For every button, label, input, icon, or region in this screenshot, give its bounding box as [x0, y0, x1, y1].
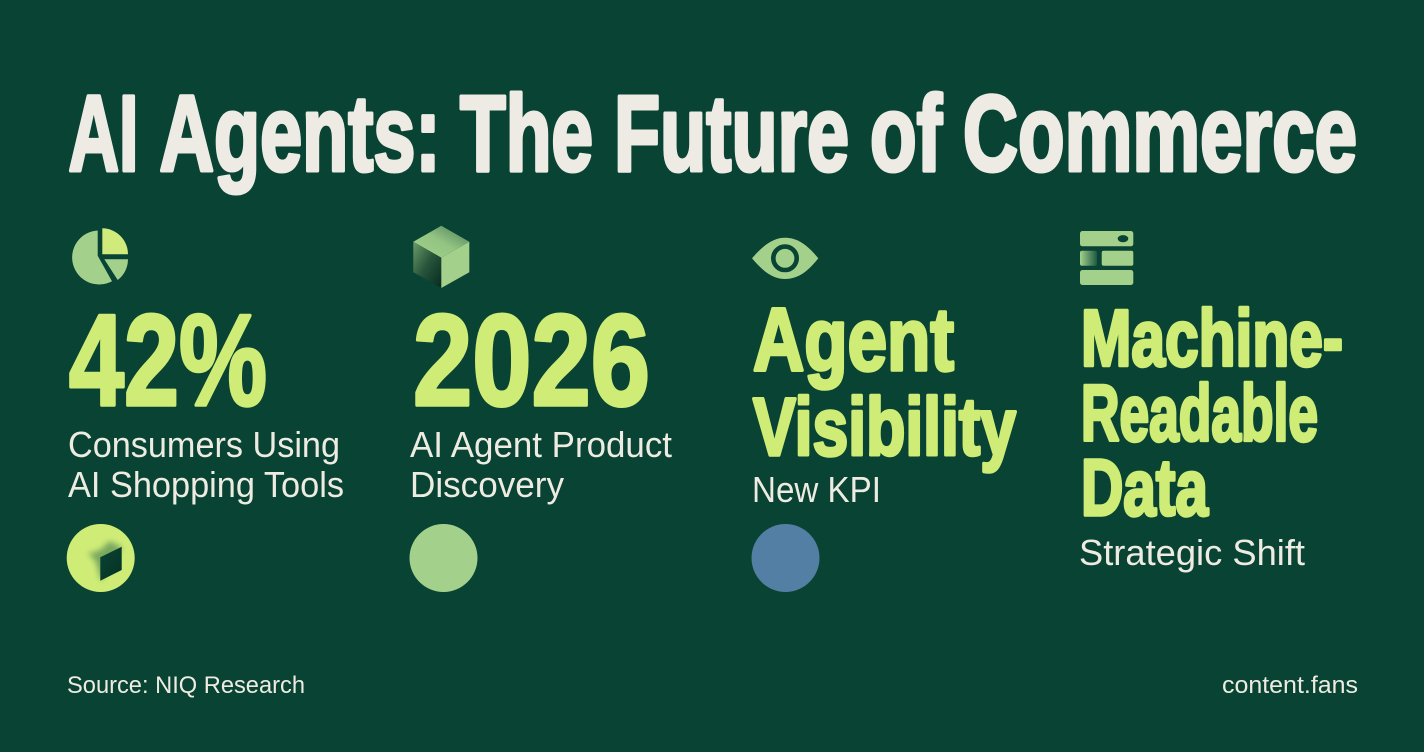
badge: lime circle with cube [67, 524, 135, 592]
title: Future [614, 72, 849, 194]
icon: cube [413, 226, 469, 288]
description: strategic shift: Strategic Shift [1079, 532, 1305, 573]
stat: machine-readable data: Data [1081, 443, 1208, 532]
title: of [870, 72, 943, 194]
stat: agent visibility: Agent [753, 289, 954, 389]
description: product discovery: AI Agent Product [410, 424, 672, 465]
brand: content.fans [1222, 672, 1358, 699]
icon: server rows [1080, 231, 1133, 285]
stat: agent visibility: Visibility [753, 382, 1016, 473]
description: product discovery: Discovery [410, 464, 564, 505]
column: 2026 [410, 226, 672, 592]
stat: 42%: 42% [69, 287, 267, 433]
description: consumers: AI Shopping Tools [68, 464, 344, 505]
icon: eye [752, 238, 818, 279]
badge: blue circle [752, 524, 820, 592]
description: consumers: Consumers Using [68, 424, 340, 465]
icon: pie chart [72, 228, 128, 284]
column: machine-readable data [1079, 231, 1343, 573]
title: The [460, 72, 593, 194]
badge: green circle [410, 524, 478, 592]
title: AI [68, 72, 138, 194]
column: 42% consumers [67, 228, 344, 592]
title: Agents: [160, 72, 440, 194]
stat: machine-readable data: Machine- [1081, 294, 1343, 382]
column: agent visibility [752, 238, 1016, 592]
description: new kpi: New KPI [752, 469, 881, 510]
stat: 2026: 2026 [413, 287, 650, 433]
source: Source: NIQ Research [67, 672, 305, 699]
